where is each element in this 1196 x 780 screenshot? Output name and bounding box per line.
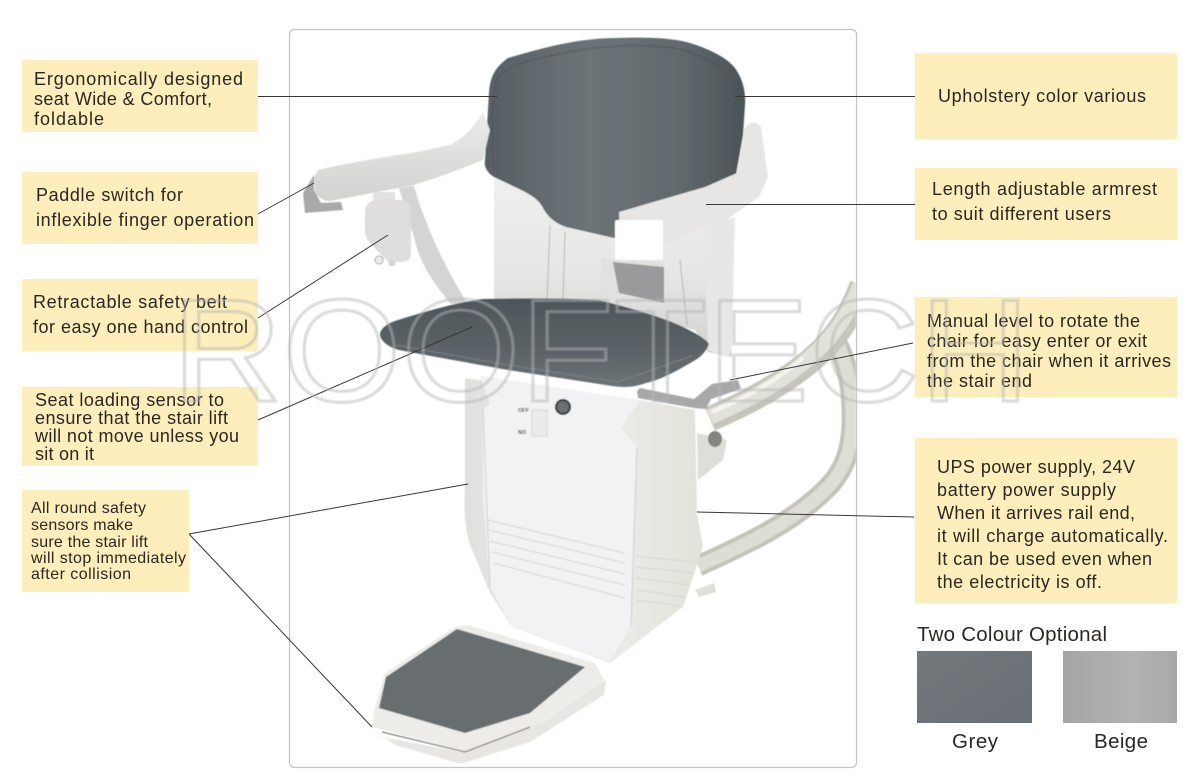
- rail foot: [695, 583, 716, 597]
- paddle switch: [303, 175, 343, 213]
- callout: safety sensors: after collision: [31, 566, 131, 583]
- lower body housing: [465, 378, 703, 663]
- callout: upholstery: Upholstery color various: [938, 86, 1146, 106]
- callout: seat sensor: [22, 387, 258, 466]
- stair lift illustration: [303, 38, 862, 764]
- callout: safety sensors: will stop immediately: [30, 550, 186, 567]
- callout: paddle switch: inflexible finger operation: [36, 210, 254, 230]
- colour options: [917, 623, 1177, 753]
- carriage behind body: [697, 431, 727, 480]
- callout: safety belt: for easy one hand control: [33, 317, 248, 337]
- callout: upholstery: [915, 53, 1177, 139]
- callout: ergonomic seat: [22, 60, 258, 132]
- ribs on housing: [483, 410, 693, 627]
- footplate mat: [379, 629, 585, 733]
- callout: power supply: battery power supply: [937, 480, 1116, 500]
- callout: safety belt: Retractable safety belt: [33, 292, 227, 312]
- backrest frame: [494, 170, 735, 357]
- callout: manual lever: from the chair when it arrives: [927, 351, 1171, 371]
- callout: paddle switch: [22, 172, 258, 244]
- callout: ergonomic seat: Ergonomically designed: [34, 69, 243, 89]
- white armrest end: [615, 220, 663, 260]
- callout: safety sensors: [22, 490, 189, 592]
- swatch: beige: [1063, 651, 1177, 753]
- callout: power supply: the electricity is off.: [937, 572, 1102, 592]
- callout: ergonomic seat: foldable: [34, 109, 104, 129]
- callout: power supply: UPS power supply, 24V: [937, 457, 1135, 477]
- swatch: grey: Grey: [952, 730, 999, 753]
- callout: manual lever: Manual level to rotate the: [927, 311, 1140, 331]
- power switch: NO: [518, 430, 527, 436]
- left armrest: [314, 112, 490, 201]
- callout: seat sensor: Seat loading sensor to: [35, 390, 224, 410]
- callout: manual lever: the stair end: [927, 371, 1032, 391]
- seat cushion: [380, 298, 709, 387]
- footplate base: [369, 680, 606, 764]
- front cover: [480, 376, 640, 661]
- watermark: ROOFTECH: [172, 269, 1030, 432]
- left arm strut: [399, 186, 468, 304]
- callout: armrest: [915, 168, 1177, 240]
- colour options heading: Two Colour Optional: [917, 623, 1107, 646]
- rotation lever: [637, 380, 741, 409]
- swatch: grey: [917, 651, 1032, 753]
- window in backrest: [601, 258, 664, 308]
- safety belt holder: [365, 192, 411, 266]
- callout: seat sensor: will not move unless you: [34, 426, 239, 446]
- callout: safety sensors: sensors make: [31, 517, 133, 534]
- power switch: [518, 400, 570, 436]
- callout: power supply: [915, 438, 1177, 603]
- callout: manual lever: chair for easy enter or exit: [927, 331, 1147, 351]
- callout: ergonomic seat: seat Wide & Comfort,: [34, 89, 212, 109]
- callout: seat sensor: ensure that the stair lift: [35, 408, 228, 428]
- callout: manual lever: [915, 297, 1177, 397]
- callout: paddle switch: Paddle switch for: [36, 185, 183, 205]
- callout: safety sensors: sure the stair lift: [31, 534, 149, 551]
- leader lines: [189, 96, 915, 727]
- photo panel frame: [290, 30, 856, 768]
- callout: safety sensors: All round safety: [31, 500, 146, 517]
- footplate shadow: [382, 727, 530, 752]
- callout: power supply: It can be used even when: [937, 549, 1152, 569]
- callout: armrest: to suit different users: [932, 204, 1111, 224]
- backrest cushion: [485, 38, 745, 240]
- callout: seat sensor: sit on it: [35, 444, 94, 464]
- power switch: OFF: [518, 408, 530, 414]
- right armrest: [619, 123, 768, 243]
- swatch: beige: Beige: [1094, 730, 1148, 753]
- callout: safety belt: [22, 279, 258, 351]
- callout: power supply: it will charge automatically.: [937, 526, 1168, 546]
- callout: power supply: When it arrives rail end,: [937, 503, 1135, 523]
- curved rails: [698, 285, 862, 566]
- footplate: [372, 625, 604, 752]
- callout: armrest: Length adjustable armrest: [932, 179, 1157, 199]
